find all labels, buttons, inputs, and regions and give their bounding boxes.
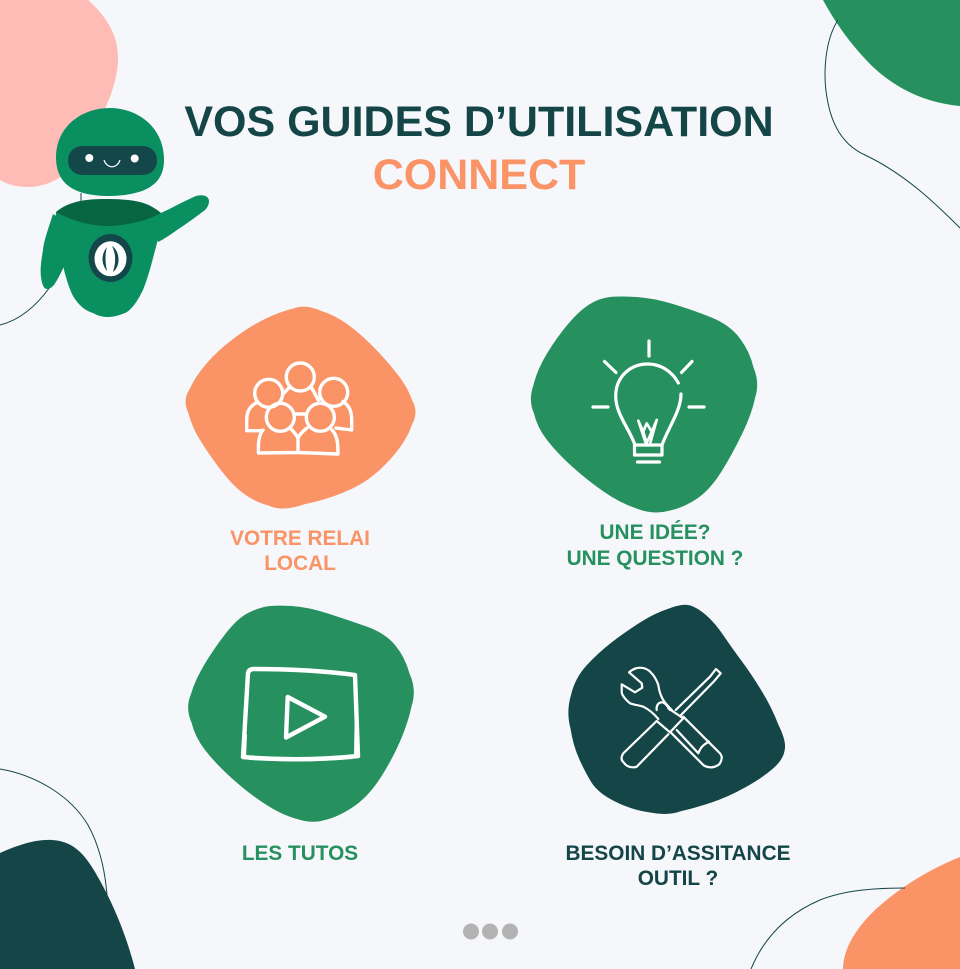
title: CONNECT [373,151,585,199]
label: assistance: OUTIL ? [638,867,718,890]
robot head [56,108,164,196]
robot left arm [41,214,70,289]
label: assistance [566,842,790,890]
blob: orange relay [186,307,416,509]
robot visor [68,146,157,175]
curve: left [0,287,50,325]
icon: wrench and screwdriver [622,668,722,767]
label: idea: UNE QUESTION ? [567,547,743,570]
label: idea: UNE IDÉE? [600,521,710,544]
curve: top right [825,20,960,228]
icon: light bulb [593,341,704,462]
label: assistance: BESOIN D’ASSITANCE [566,842,790,865]
icon: play video [243,669,358,760]
label: tutorials: LES TUTOS [242,842,358,865]
label: relay: LOCAL [264,552,336,575]
decorative blob: orange bottom right [843,857,960,969]
blob: green idea [531,296,757,513]
decorative blob: green top right [823,0,960,106]
robot smile [104,160,120,167]
label: relay [230,527,370,575]
title: VOS GUIDES D’UTILISATION [184,98,774,146]
label: idea [567,520,743,570]
decorative blob: dark bottom left [0,840,135,969]
robot right arm [150,195,209,242]
robot badge logo [88,234,132,282]
robot collar [56,199,161,226]
curve: bottom right [751,888,905,969]
label: relay: VOTRE RELAI [230,527,370,550]
decorative blob: pink top left [0,0,118,187]
robot body [55,212,161,317]
pagination dots [463,924,518,940]
robot eyes [85,154,139,162]
icon: group of people [247,363,352,454]
robot mascot [41,108,209,317]
blob: dark assistance [568,605,785,814]
blob: green tutorials [188,606,414,822]
curve: bottom left [0,769,107,895]
robot neck [80,193,82,204]
title [184,98,774,199]
